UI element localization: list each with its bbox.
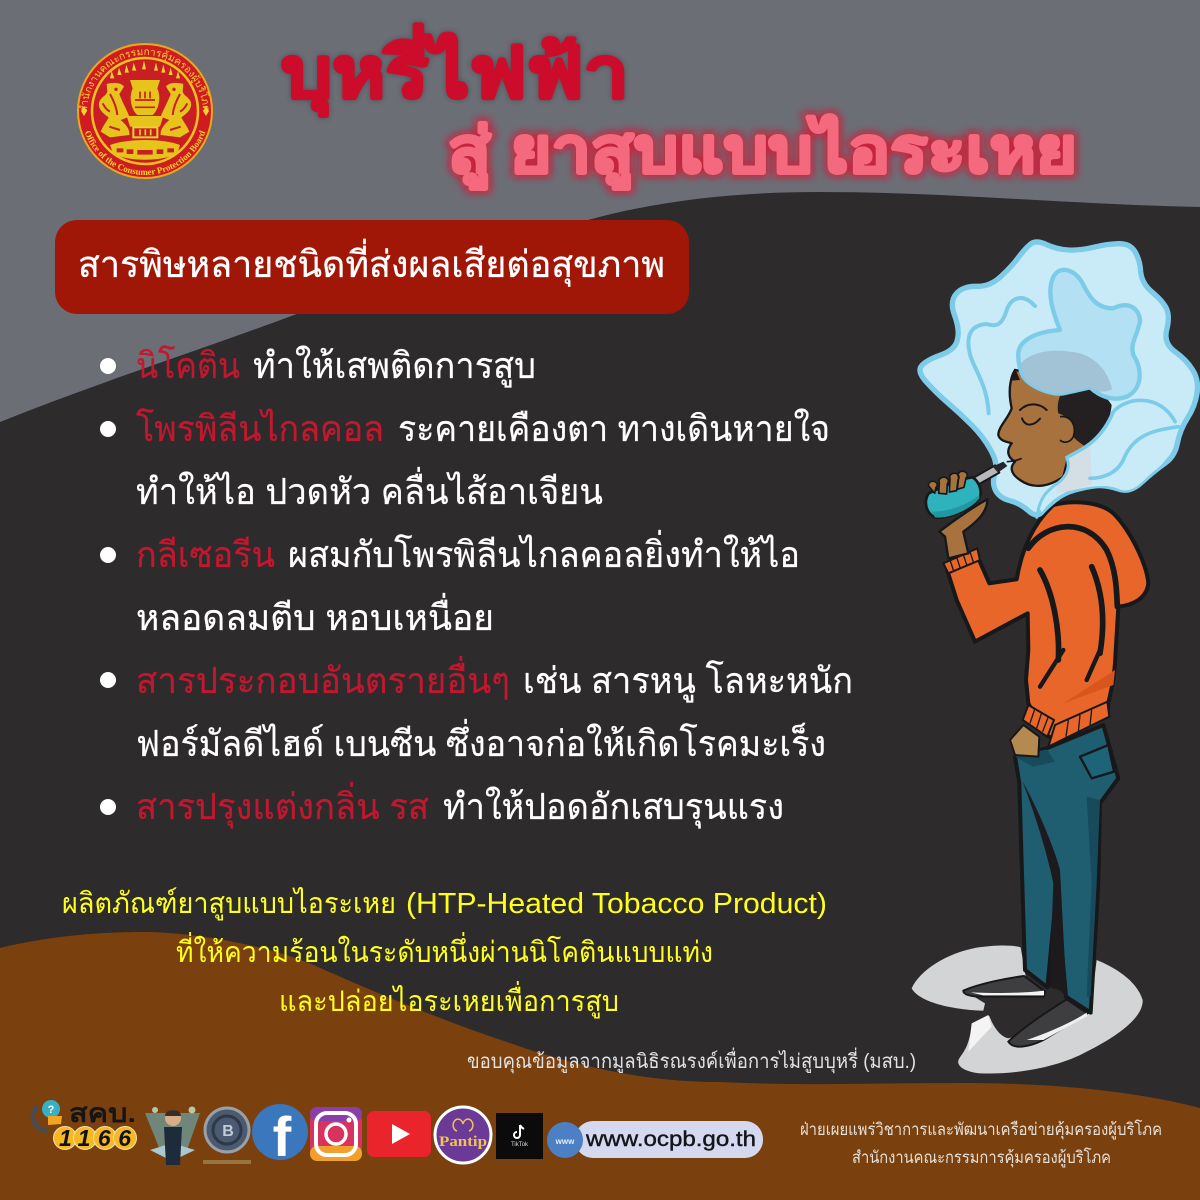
- bullet: propylene glycol: ระคายเคืองตา ทางเดินหายใจ: [398, 408, 830, 449]
- icon: hotline 1166: สคบ.: [69, 1098, 136, 1128]
- bullet: propylene glycol: ทำให้ไอ ปวดหัว คลื่นไส้อาเจียน: [136, 467, 603, 512]
- bullet: other hazardous substances: สารประกอบอันตรายอื่นๆ: [136, 656, 510, 701]
- callout: HTP explanation: [62, 886, 827, 1019]
- logo: Office of the Consumer Protection Board seal: [77, 43, 213, 179]
- hand and vape device: [926, 462, 1007, 558]
- icon: gold ring logo: [203, 1108, 251, 1164]
- icon: TikTok: [496, 1113, 543, 1159]
- bullet: glycerin: หลอดลมตีบ หอบเหนื่อย: [136, 593, 494, 638]
- icon: Pantip: Pantip: [439, 1134, 487, 1150]
- bullet: nicotine: นิโคติน: [136, 345, 240, 386]
- vapour dome over head: [1018, 270, 1140, 399]
- icon: cartoon presenter: [145, 1106, 200, 1165]
- bullet: flavourings: ทำให้ปอดอักเสบรุนแรง: [443, 786, 784, 829]
- bullet: nicotine: ทำให้เสพติดการสูบ: [253, 345, 536, 388]
- illustration: man vaping: [912, 242, 1197, 1074]
- bullet: propylene glycol: [100, 408, 830, 512]
- bullet: flavourings: สารปรุงแต่งกลิ่น รส: [136, 782, 429, 829]
- icon: Instagram: [310, 1107, 362, 1161]
- callout: HTP explanation: และปล่อยไอระเหยเพื่อการสูบ: [279, 981, 619, 1019]
- heading banner: toxic substances: [55, 220, 689, 314]
- bullet: glycerin: [100, 530, 800, 638]
- footer: publisher text: [800, 1119, 1162, 1168]
- vapour cloud: [920, 242, 1197, 515]
- icon: Facebook: [252, 1104, 308, 1168]
- shoes: [963, 976, 1045, 997]
- icon: website link: [547, 1121, 763, 1158]
- bullet: nicotine: [100, 345, 536, 388]
- heading banner: toxic substances: สารพิษหลายชนิดที่ส่งผลเสียต่อสุขภาพ: [78, 238, 665, 287]
- bottom logos row: [33, 1098, 763, 1168]
- icon: Pantip: [435, 1107, 491, 1163]
- icon: website link: www.ocpb.go.th: [585, 1128, 756, 1151]
- legs and trousers: [963, 725, 1118, 1047]
- callout: HTP explanation: ผลิตภัณฑ์ยาสูบแบบไอระเหย: [62, 886, 396, 921]
- bullet list: toxic ingredients: [100, 345, 853, 829]
- pocket hand: [1010, 725, 1039, 757]
- head: [998, 368, 1112, 486]
- bullet: glycerin: กลีเซอรีน: [136, 534, 275, 575]
- icon: TikTok: TikTok: [511, 1142, 529, 1148]
- icon: Facebook: f: [273, 1105, 292, 1168]
- bullet: glycerin: ผสมกับโพรพิลีนไกลคอลยิ่งทำให้ไอ: [288, 530, 800, 575]
- icon: gold ring logo: B: [222, 1123, 234, 1140]
- neck vapour and lower puff: [1039, 400, 1176, 512]
- footer: publisher text: สำนักงานคณะกรรมการคุ้มครองผู้บริโภค: [852, 1147, 1111, 1168]
- floor shadow: [912, 945, 1143, 1074]
- icon: hotline 1166: ?: [48, 1104, 55, 1116]
- bullet: flavourings: [100, 782, 784, 829]
- bullet: propylene glycol: โพรพิลีนไกลคอล: [136, 408, 384, 449]
- icon: website link: www: [555, 1137, 575, 1146]
- hoodie body and sleeve: [943, 502, 1148, 757]
- icon: hotline 1166: [33, 1098, 137, 1151]
- icon: hotline 1166: 1166: [59, 1125, 131, 1151]
- credit line: ขอบคุณข้อมูลจากมูลนิธิรณรงค์เพื่อการไม่สูบบุหรี่ (มสบ.): [467, 1047, 916, 1074]
- title: e-cigarettes: บุหรี่ไฟฟ้า: [281, 23, 629, 117]
- logo: Office of the Consumer Protection Board seal: สำนักงานคณะกรรมการคุ้มครองผู้บริโภค: [79, 49, 210, 112]
- subtitle: to heated tobacco, glowing: สู่ ยาสูบแบบไอระเหย: [448, 114, 1077, 190]
- callout: HTP explanation: (HTP-Heated Tobacco Product): [406, 888, 827, 920]
- subtitle: to heated tobacco, glowing: สู่ ยาสูบแบบไอระเหย: [448, 114, 1077, 190]
- icon: YouTube: [367, 1111, 431, 1157]
- logo: Office of the Consumer Protection Board seal: Office of the Consumer Protection Board: [85, 130, 206, 175]
- title: e-cigarettes: บุหรี่ไฟฟ้า: [281, 23, 629, 117]
- bullet: other hazardous substances: ฟอร์มัลดีไฮด์ เบนซีน ซึ่งอาจก่อให้เกิดโรคมะเร็ง: [136, 719, 826, 764]
- callout: HTP explanation: ที่ให้ความร้อนในระดับหนึ่งผ่านนิโคตินแบบแท่ง: [176, 932, 713, 969]
- bullet: other hazardous substances: เช่น สารหนู โลหะหนัก: [523, 660, 853, 703]
- bullet: other hazardous substances: [100, 656, 853, 764]
